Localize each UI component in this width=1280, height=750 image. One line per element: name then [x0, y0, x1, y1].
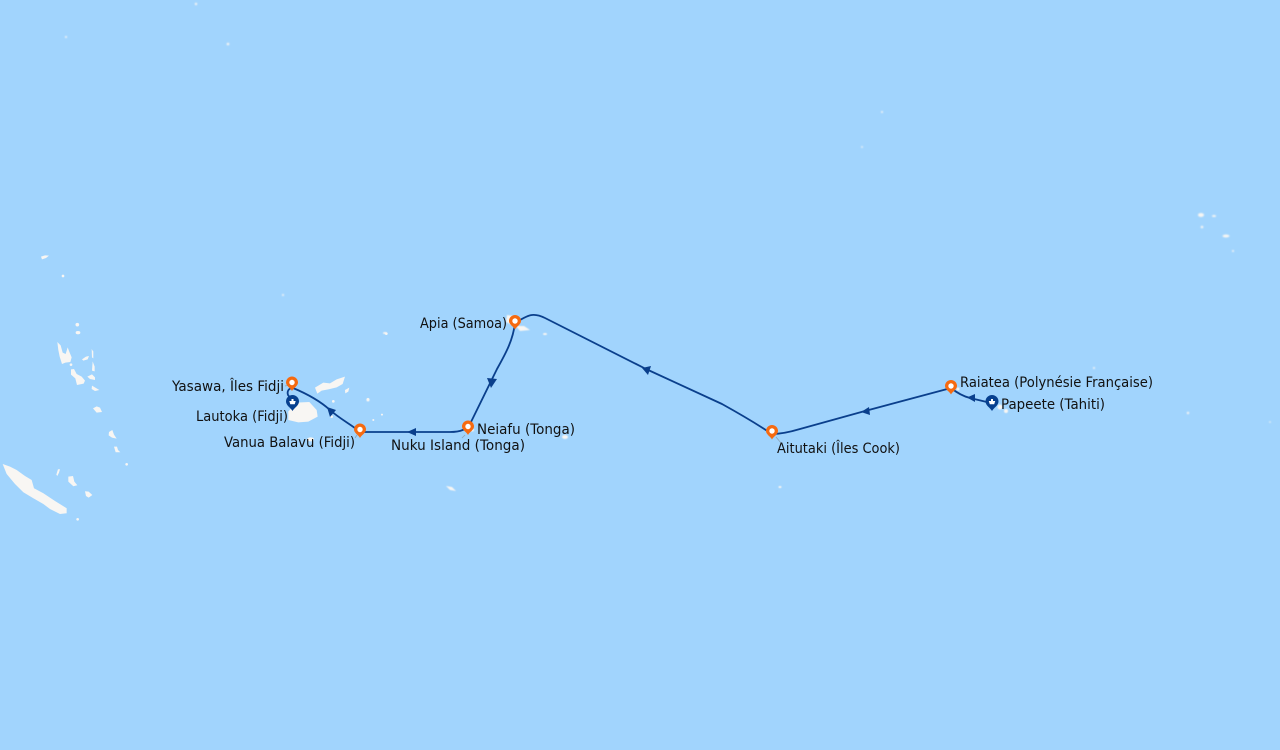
pin: Neiafu: [462, 420, 474, 435]
label: Aitutaki: Aitutaki (Îles Cook): [777, 439, 900, 457]
label: Papeete: Papeete (Tahiti): [1001, 397, 1105, 413]
islands: New Caledonia and Vanuatu: [3, 255, 128, 521]
pin: Aitutaki: [766, 425, 778, 440]
pin: Vanua Balavu: [354, 424, 366, 438]
islands: Fiji: [288, 332, 388, 441]
pin: Papeete (departure): [986, 395, 998, 411]
route direction arrows: [327, 366, 975, 436]
cruise route line: [288, 315, 991, 434]
label: Lautoka: Lautoka (Fidji): [196, 409, 288, 425]
label: Raiatea: Raiatea (Polynésie Française): [960, 375, 1153, 391]
pin: Yasawa: [286, 376, 298, 391]
pin: Raiatea: [945, 380, 957, 394]
islands: Society Islands: [956, 388, 1008, 413]
label: Vanua Balavu: Vanua Balavu (Fidji): [224, 435, 355, 451]
port labels: [171, 316, 1153, 457]
label: Neiafu: Neiafu (Tonga): [477, 422, 575, 438]
islands: faint distant atolls: [65, 3, 1271, 423]
label: Yasawa: Yasawa, Îles Fidji: [171, 377, 284, 395]
label: Apia: Apia (Samoa): [420, 316, 507, 332]
islands: Samoa, Tonga and Cook: [366, 315, 782, 491]
pin: Lautoka (arrival): [286, 395, 299, 411]
label: Nuku Island: Nuku Island (Tonga): [391, 438, 525, 454]
label leader lines: [285, 385, 781, 443]
pin: Apia: [509, 315, 521, 330]
